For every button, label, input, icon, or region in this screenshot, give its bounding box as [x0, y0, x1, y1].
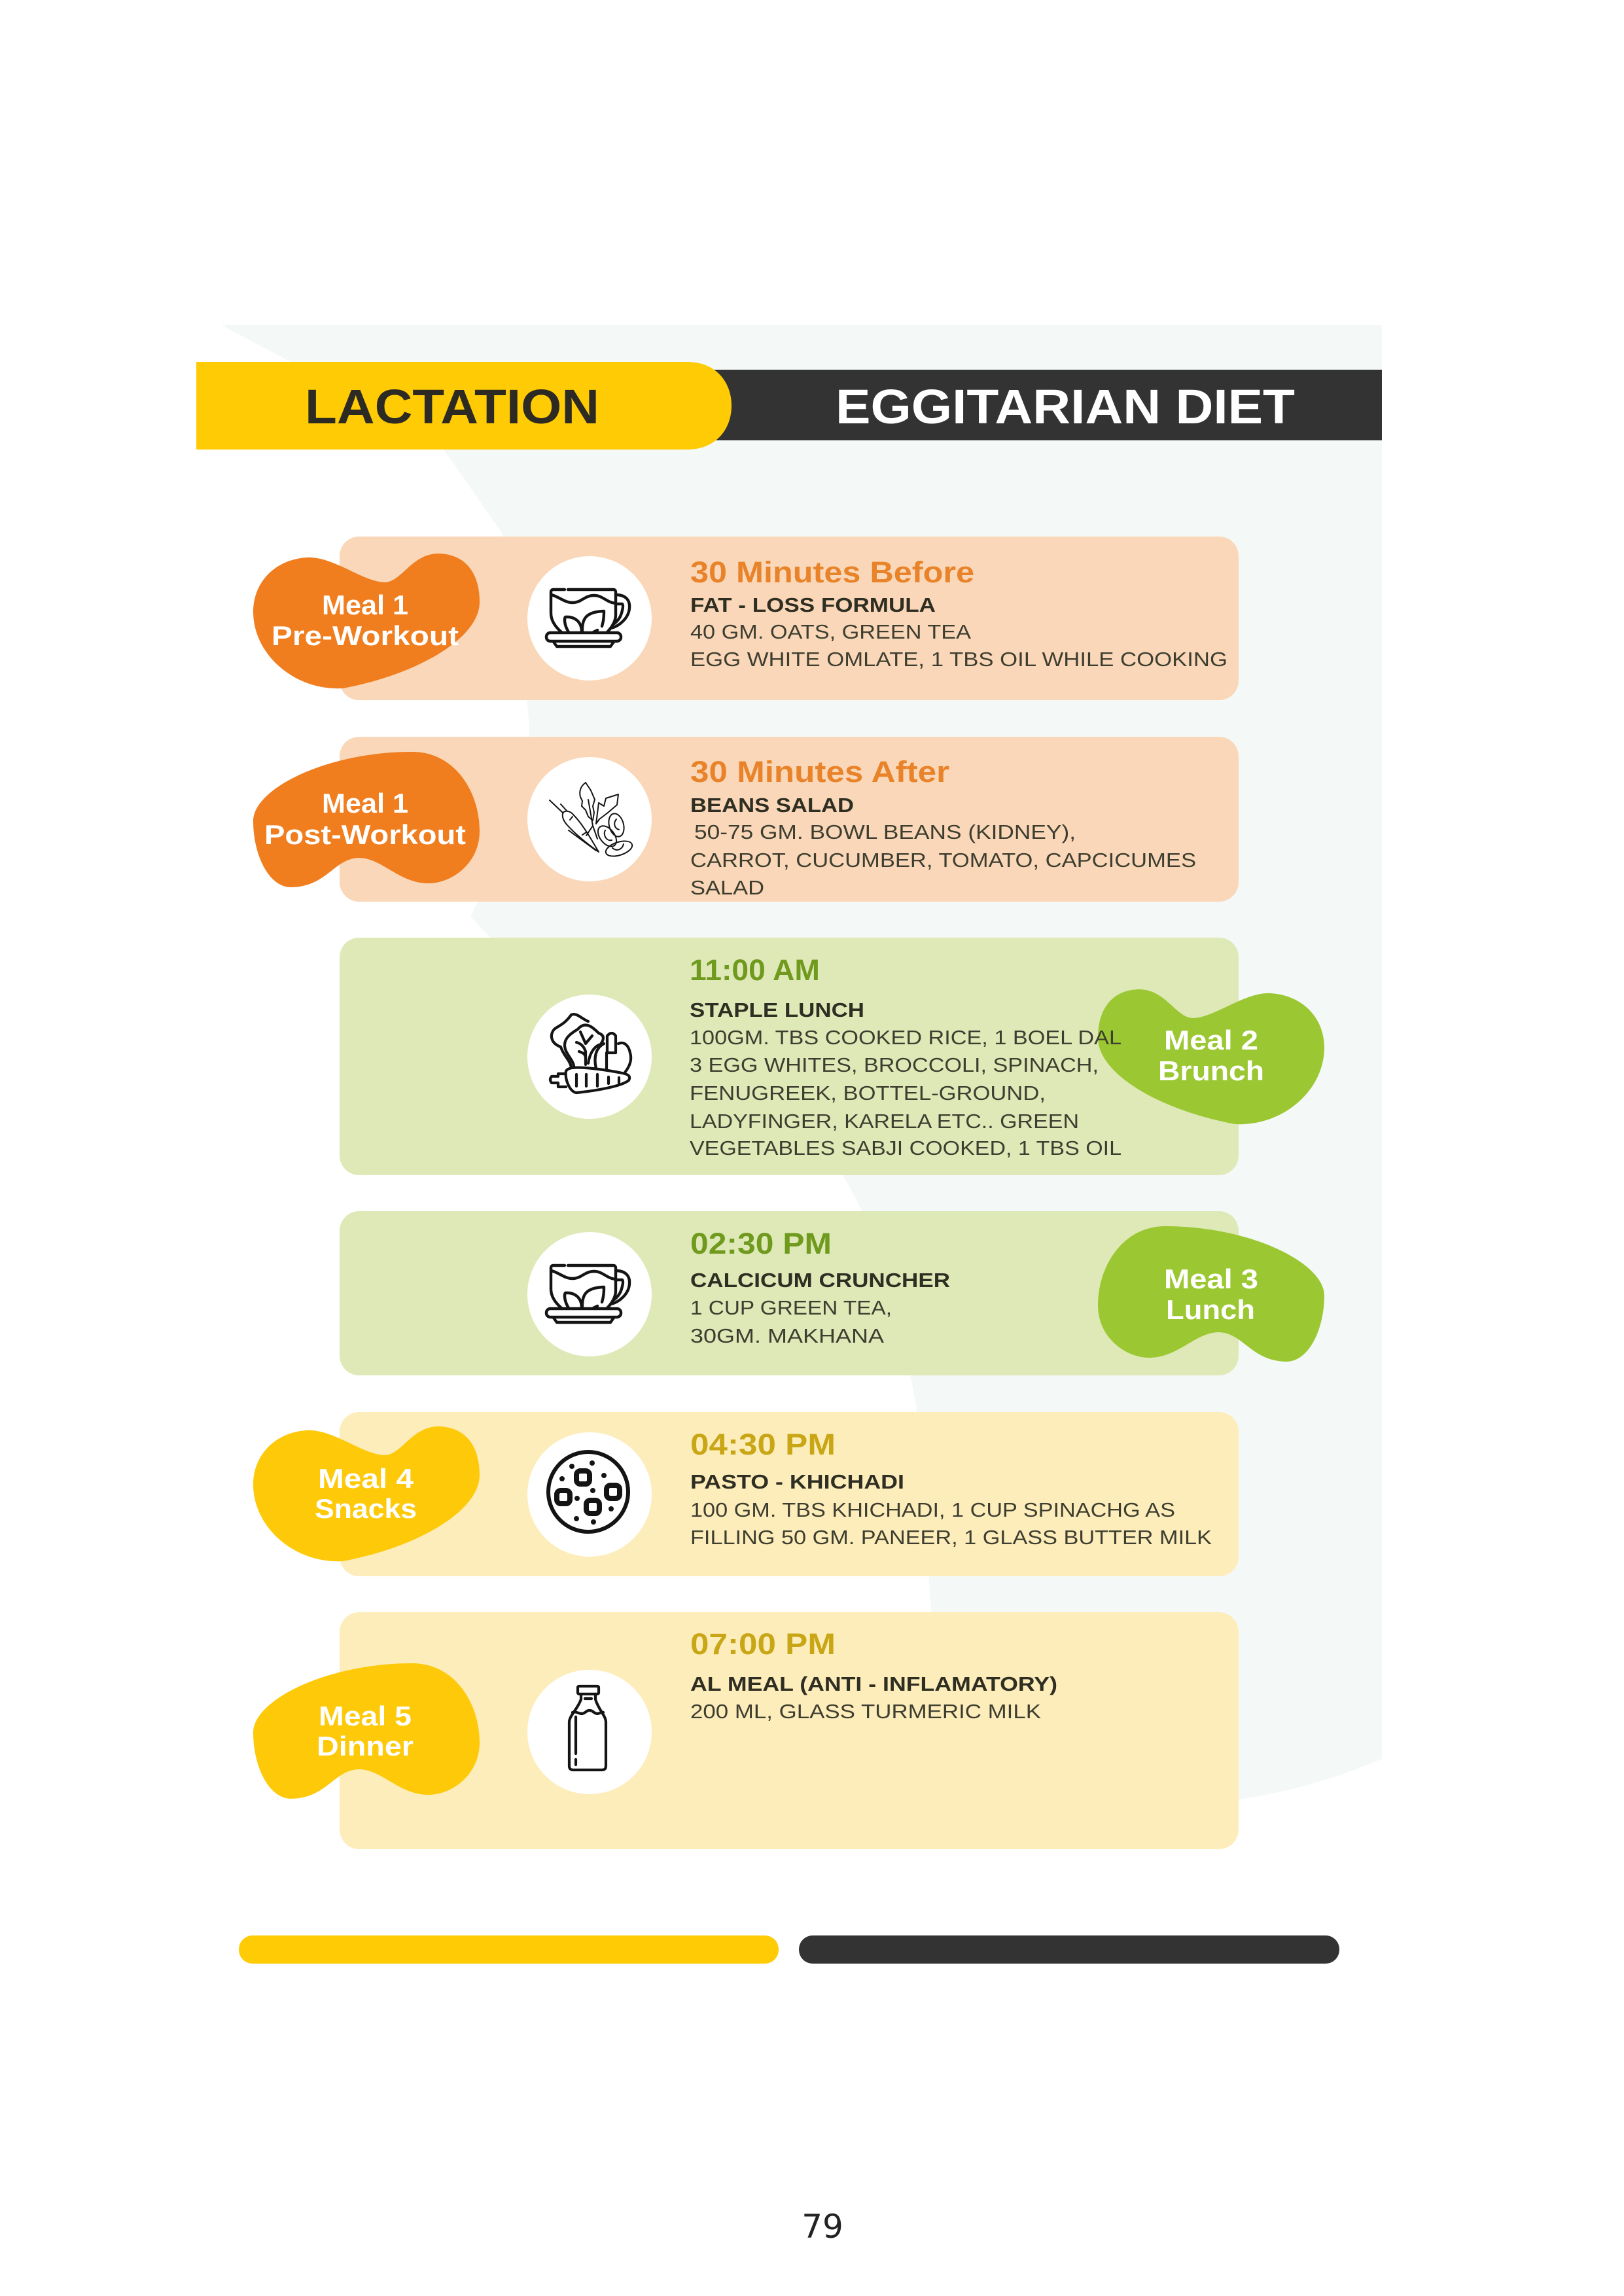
meal text: 04:30 PM [690, 1428, 836, 1461]
meal text: BEANS SALAD [690, 794, 854, 817]
panel: meal 3 lunch [340, 1211, 1324, 1375]
meal text: EGG WHITE OMLATE, 1 TBS OIL WHILE COOKING [690, 648, 1227, 671]
meal text: FILLING 50 GM. PANEER, 1 GLASS BUTTER MILK [690, 1526, 1212, 1549]
meal badge: Pre-Workout [272, 620, 459, 651]
meal text: 30 Minutes After [690, 755, 949, 788]
meal text: 40 GM. OATS, GREEN TEA [690, 620, 971, 643]
meal badge [1098, 989, 1324, 1124]
panel: meal 2 brunch [340, 938, 1324, 1175]
panel: meal 1 post-workout [253, 737, 1239, 902]
meal badge [253, 554, 480, 688]
icon: tea cup [527, 556, 652, 680]
meal text: FAT - LOSS FORMULA [690, 593, 936, 616]
meal badge: Meal 1 [322, 590, 408, 620]
meal text [690, 1428, 1212, 1549]
panel: meal 1 pre-workout [253, 537, 1239, 700]
icon: carrot, leaves and beans [527, 757, 652, 881]
meal text: FENUGREEK, BOTTEL-GROUND, [690, 1082, 1046, 1104]
icon: milk bottle [527, 1670, 652, 1794]
meal text: 1 CUP GREEN TEA, [690, 1296, 892, 1319]
heading: eggitarian diet: EGGITARIAN DIET [836, 380, 1295, 434]
meal text: 30 Minutes Before [690, 556, 974, 589]
panel background [340, 1612, 1239, 1849]
meal badge [253, 1663, 480, 1799]
heading: lactation: LACTATION [305, 380, 599, 434]
meal badge: Lunch [1166, 1294, 1255, 1325]
icon: cookie [527, 1432, 652, 1557]
panel background [340, 938, 1239, 1175]
background shape [222, 325, 1382, 1819]
meal text: 3 EGG WHITES, BROCCOLI, SPINACH, [690, 1053, 1099, 1076]
banner yellow tab [196, 362, 732, 450]
meal badge: Meal 5 [319, 1701, 412, 1731]
meal badge [253, 752, 480, 887]
title banner [196, 362, 1382, 450]
meal text: 02:30 PM [690, 1227, 832, 1260]
meal text: 07:00 PM [690, 1627, 836, 1661]
meal badge: Dinner [317, 1731, 414, 1761]
meal text [690, 1227, 950, 1347]
meal text: 100 GM. TBS KHICHADI, 1 CUP SPINACHG AS [690, 1498, 1175, 1521]
meal text: VEGETABLES SABJI COOKED, 1 TBS OIL [690, 1137, 1121, 1159]
meal text: PASTO - KHICHADI [690, 1470, 904, 1493]
panel background [340, 737, 1239, 902]
meal text: 200 ML, GLASS TURMERIC MILK [690, 1700, 1041, 1723]
panel background [340, 1412, 1239, 1576]
meal badge: Meal 2 [1164, 1025, 1258, 1055]
meal text: CALCICUM CRUNCHER [690, 1269, 950, 1292]
meal text: 11:00 AM [690, 953, 820, 987]
panel: meal 4 snacks [253, 1412, 1239, 1576]
icon: tea cup [527, 1232, 652, 1356]
meal text: 30GM. MAKHANA [690, 1324, 884, 1347]
meal badge: Snacks [315, 1493, 417, 1524]
meal text: LADYFINGER, KARELA ETC.. GREEN [690, 1110, 1079, 1133]
page number: 79 [802, 2208, 843, 2246]
panel: meal 5 dinner [253, 1612, 1239, 1849]
meal text [690, 953, 1121, 1159]
panel background [340, 537, 1239, 700]
meal text [690, 755, 1196, 899]
meal text: 100GM. TBS COOKED RICE, 1 BOEL DAL [690, 1026, 1121, 1049]
meal text [690, 1627, 1057, 1723]
footer bar: yellow [239, 1935, 779, 1964]
meal text: STAPLE LUNCH [690, 998, 864, 1021]
meal text: 50-75 GM. BOWL BEANS (KIDNEY), [694, 821, 1076, 843]
meal badge: Meal 1 [322, 788, 408, 819]
footer bar: dark [799, 1935, 1339, 1964]
meal text [690, 556, 1227, 671]
meal badge [253, 1426, 480, 1561]
panel background [340, 1211, 1239, 1375]
meal text: CARROT, CUCUMBER, TOMATO, CAPCICUMES [690, 849, 1196, 872]
meal text: AL MEAL (ANTI - INFLAMATORY) [690, 1672, 1057, 1695]
meal text: SALAD [690, 876, 764, 899]
meal badge: Meal 3 [1164, 1263, 1258, 1294]
banner dark bar [707, 370, 1382, 440]
meal badge [1098, 1226, 1324, 1362]
meal badge: Post-Workout [264, 819, 466, 850]
icon: vegetables [527, 995, 652, 1119]
meal badge: Brunch [1158, 1055, 1264, 1086]
meal badge: Meal 4 [318, 1463, 414, 1494]
